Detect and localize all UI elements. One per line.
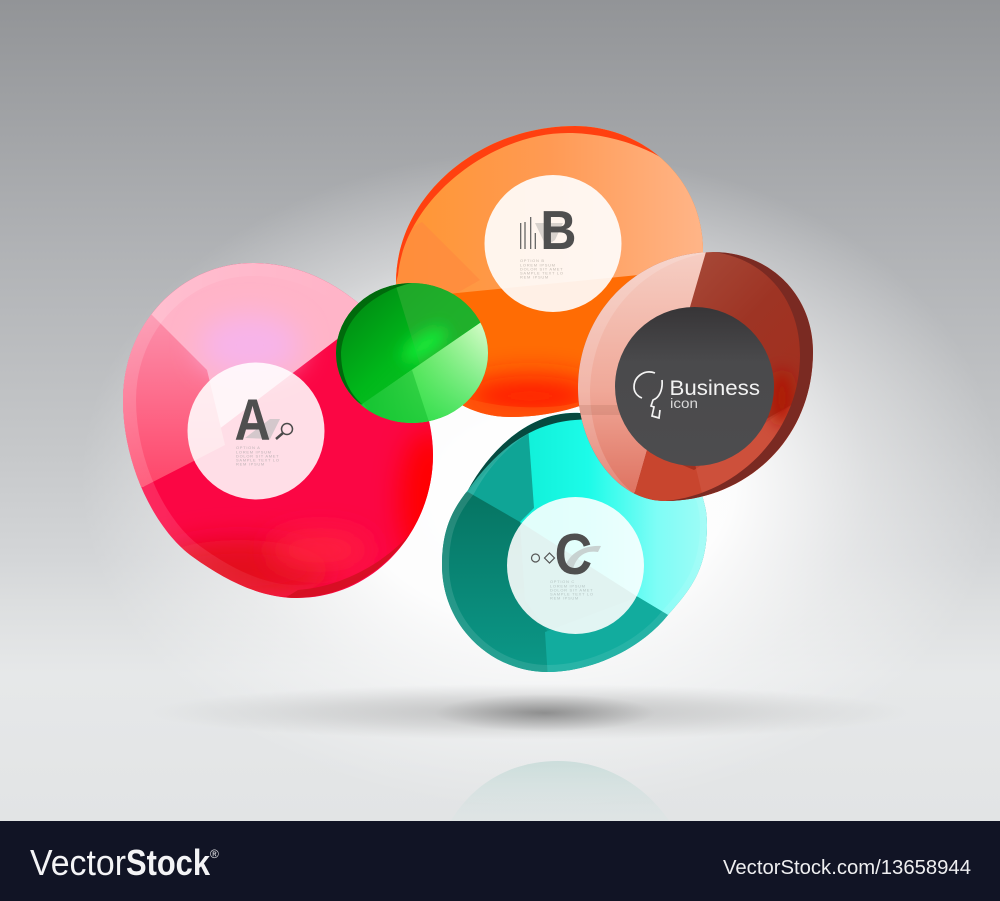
letter B shadow [535, 223, 563, 246]
heading: Business: Business [670, 376, 760, 400]
text block C: SAMPLE TEXT LO [550, 592, 594, 596]
registered mark: ® [210, 847, 219, 861]
letter A shadow [245, 419, 280, 439]
floor shadow [150, 684, 910, 740]
text block B: SAMPLE TEXT LO [520, 270, 564, 276]
bubble A: pink and red [123, 263, 433, 598]
text block A: LOREM IPSUM [236, 450, 272, 454]
text block A: REM IPSUM [236, 462, 265, 466]
bubble D: red glass [578, 252, 813, 501]
text block C: LOREM IPSUM [550, 584, 586, 588]
text block A: DOLOR SIT AMET [236, 454, 279, 458]
letter C: C [555, 523, 592, 587]
text block C: REM IPSUM [550, 596, 579, 600]
footer id: VectorStock.com/13658944 [723, 857, 971, 879]
text block A [236, 445, 280, 466]
text block A: SAMPLE TEXT LO [236, 458, 280, 462]
text block C: OPTION C [550, 579, 575, 584]
text block B: OPTION B [520, 258, 545, 263]
footer logo: Stock [126, 842, 211, 883]
text block B: REM IPSUM [520, 274, 549, 280]
icon: bars [521, 217, 535, 249]
footer bar [0, 821, 1000, 901]
letter C shadow [564, 546, 601, 572]
floor reflection [450, 761, 670, 822]
icon: circle and diamond [532, 553, 554, 563]
bubble B: orange [390, 120, 710, 420]
panel B: white circle [484, 175, 622, 312]
panel A: white circle [188, 362, 324, 500]
text block B [520, 258, 564, 280]
text block B: LOREM IPSUM [520, 262, 556, 268]
text block A: OPTION A [236, 445, 260, 450]
panel C: white circle [507, 497, 644, 634]
subheading: icon: icon [670, 395, 698, 411]
icon: key [634, 372, 662, 418]
bubble C: teal [442, 412, 707, 672]
panel D: dark circle [615, 307, 774, 466]
text block C: DOLOR SIT AMET [550, 588, 593, 592]
text block C [550, 579, 594, 600]
letter A: A [234, 389, 271, 453]
icon: magnifier [276, 424, 292, 439]
text block B: DOLOR SIT AMET [520, 266, 563, 272]
letter B: B [540, 200, 577, 262]
bubble: small green sphere [336, 283, 488, 423]
footer logo [30, 842, 211, 883]
footer logo: Vector [30, 842, 126, 883]
